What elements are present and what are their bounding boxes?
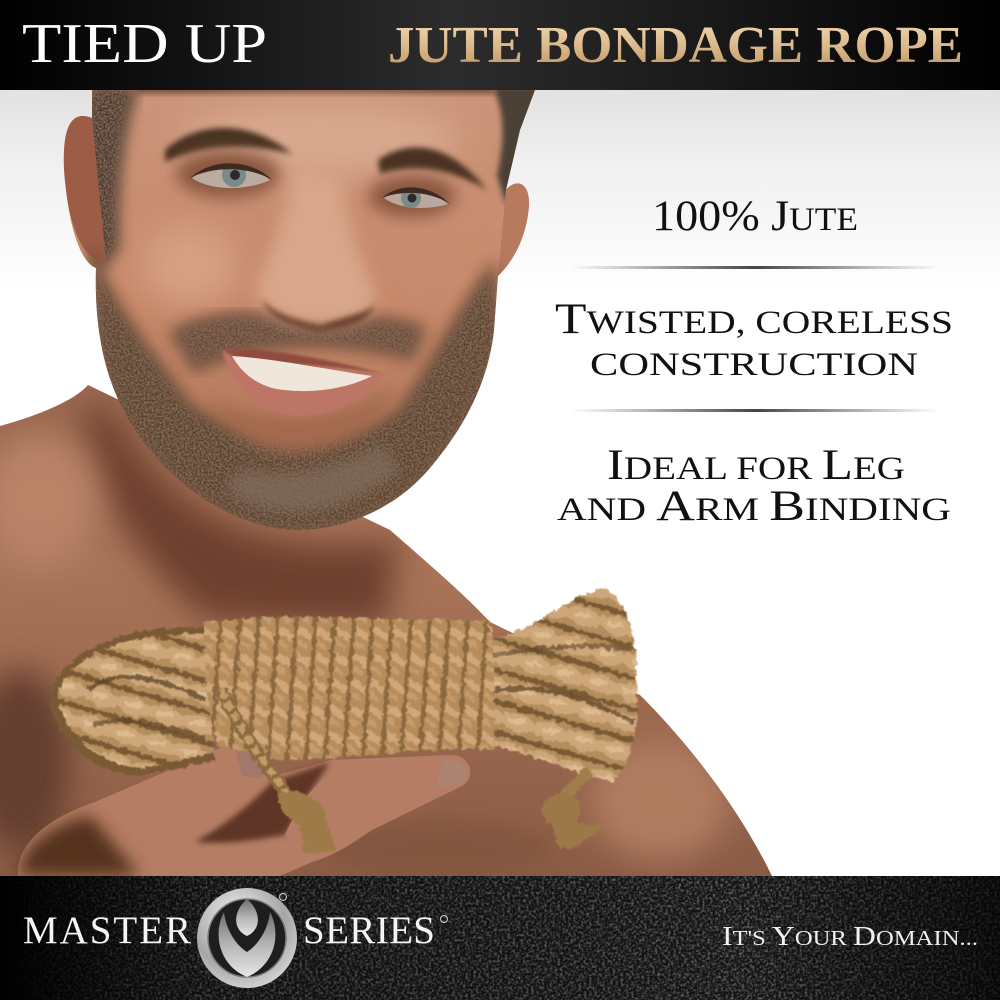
rope tail right knot: [542, 770, 604, 848]
rope coil: right bundle: [485, 588, 638, 782]
product line: TIED UP: [22, 13, 267, 75]
rope wrap: middle coil: [203, 617, 495, 760]
beard: [92, 250, 500, 534]
footer band: [0, 876, 1000, 1000]
face light: [180, 104, 460, 176]
photo background: [0, 90, 1000, 876]
mouth: [222, 349, 384, 416]
feature: ideal for leg and arm binding: [557, 442, 951, 530]
moustache and lip stubble: [170, 313, 425, 372]
rope tail with knot: [222, 690, 336, 854]
header band: [0, 0, 1000, 90]
ears: [64, 116, 106, 262]
grey chin stubble: [225, 445, 400, 511]
feature: twisted coreless construction: [555, 296, 953, 383]
hand: [18, 742, 470, 876]
tagline: IT'S YOUR DOMAIN...: [722, 921, 978, 951]
body shading: [0, 410, 730, 880]
feature: 100% jute: 100% JUTE: [652, 193, 858, 240]
hair: [84, 86, 138, 272]
chin skin: [205, 385, 395, 452]
body: neck and shoulders: [0, 385, 772, 876]
head: [50, 84, 550, 540]
nose: [256, 170, 376, 332]
brand: master: MASTER: [23, 909, 191, 952]
brand: series: SERIES: [303, 909, 435, 952]
eyebrows: [165, 128, 487, 190]
eyes: [176, 150, 456, 217]
product name: JUTE BONDAGE ROPE: [388, 17, 963, 74]
rope coil: left loop: [50, 627, 215, 775]
feature: ideal for leg and arm binding: AND ARM BINDING: [557, 483, 951, 530]
feature: ideal for leg and arm binding: IDEAL FOR LEG: [607, 442, 905, 489]
logo: M emblem: [197, 888, 297, 988]
feature: twisted coreless construction: TWISTED, CORELESS: [555, 296, 953, 343]
feature: twisted coreless construction: CONSTRUCTION: [590, 347, 918, 383]
registered marks: [280, 894, 448, 922]
photo: smiling man with rope: [0, 84, 772, 880]
